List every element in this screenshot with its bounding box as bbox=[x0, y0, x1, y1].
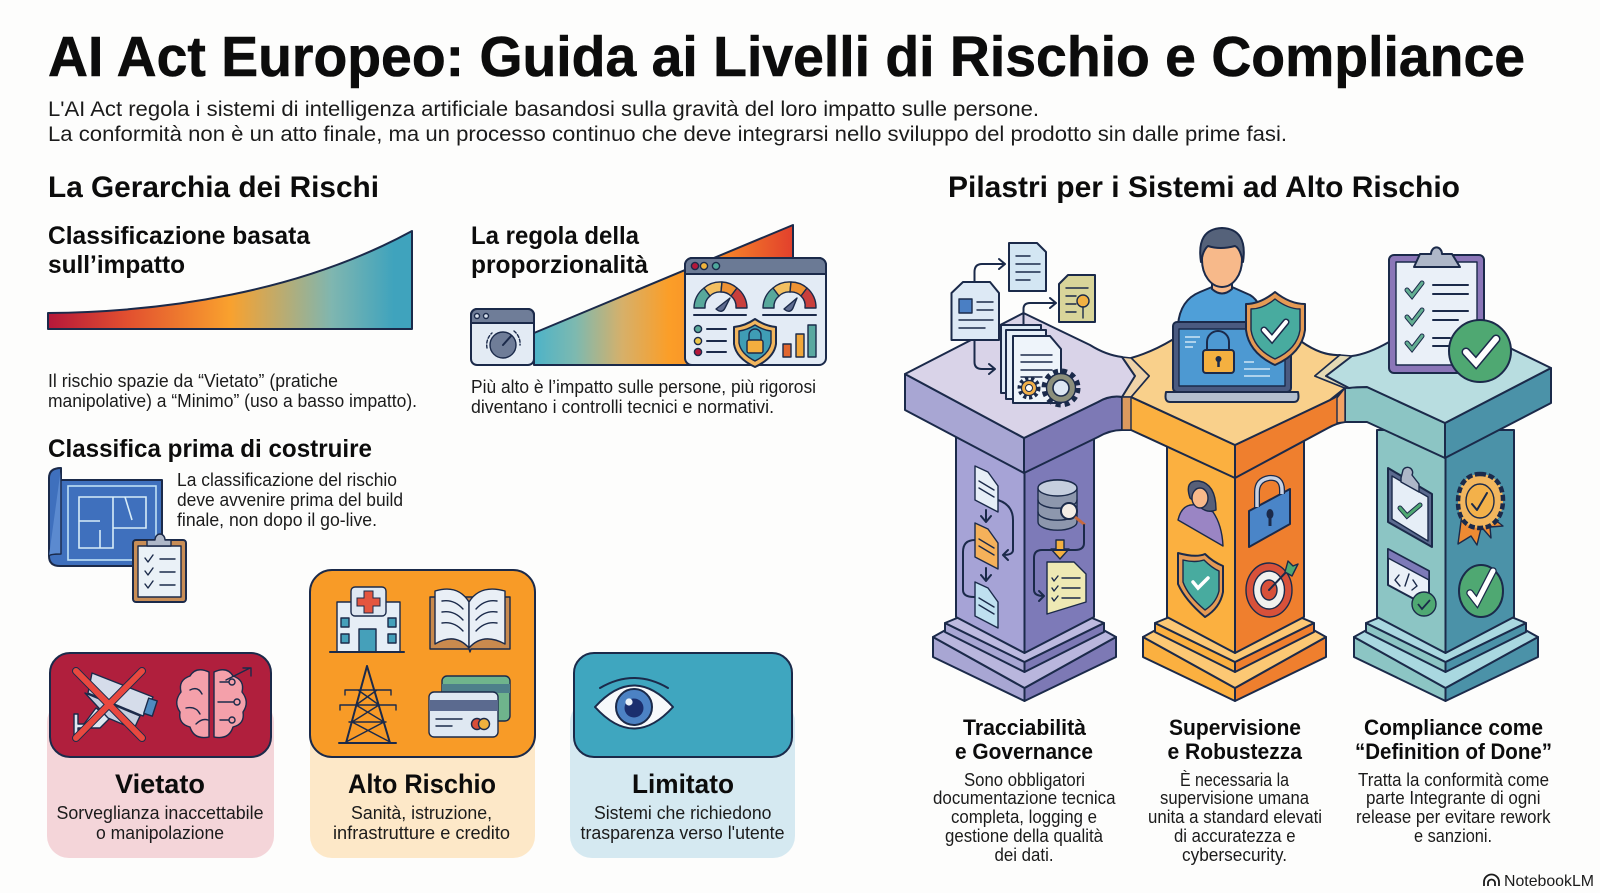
text: proportional rule bbox=[471, 377, 816, 417]
text: pillar 3 caption bbox=[1355, 715, 1552, 846]
heading: classificazione: sull’impatto bbox=[48, 251, 185, 279]
description: supervisione bbox=[1148, 770, 1322, 865]
heading: Compliance come Definition of Done bbox=[1355, 715, 1552, 764]
text: Limitato title: Limitato bbox=[632, 769, 734, 799]
text: Alto Rischio description: infrastrutture e credito bbox=[333, 823, 510, 843]
block: classifica prima di costruire bbox=[48, 435, 403, 602]
heading: Supervisione e Robustezza bbox=[1168, 715, 1303, 764]
platform: connected capitals bbox=[905, 307, 1551, 478]
description: supervisione: unita a standard elevati bbox=[1148, 807, 1322, 827]
icons: pillar 3 compliance bbox=[1388, 467, 1503, 617]
block: regola della proporzionalità bbox=[471, 222, 826, 417]
icon: shield bbox=[1246, 292, 1305, 365]
text: proportional rule: diventano i controlli tecnici e normativi. bbox=[471, 397, 774, 417]
chart: risk gradient curve bbox=[48, 231, 412, 329]
heading: Tracciabilità e Governance: Tracciabilità bbox=[963, 715, 1087, 740]
icon: person bbox=[1178, 228, 1264, 325]
heading: Compliance come Definition of Done: Compliance come bbox=[1364, 715, 1543, 740]
icon: dial window bbox=[471, 309, 534, 365]
icons: pillar 2 oversight bbox=[1178, 478, 1298, 617]
heading: proporzionalità: proporzionalità bbox=[471, 251, 648, 279]
icons: pillar 1 workflow bbox=[963, 466, 1086, 628]
text: risk range bbox=[48, 371, 417, 411]
description: supervisione: di accuratezza e bbox=[1174, 826, 1296, 846]
description: governance: Sono obbligatori bbox=[964, 770, 1085, 790]
card: Vietato bbox=[47, 653, 274, 858]
icon: eye bbox=[595, 678, 673, 728]
text: pillar 2 caption bbox=[1148, 715, 1322, 865]
icon: dashboard bbox=[685, 258, 826, 367]
heading: pilastri: Pilastri per i Sistemi ad Alto Rischio bbox=[948, 171, 1460, 204]
icon: checklist clipboard bbox=[1389, 247, 1484, 373]
description: governance: gestione della qualità bbox=[945, 826, 1104, 846]
card: Limitato bbox=[570, 653, 795, 858]
icon: hospital bbox=[330, 587, 404, 652]
text: classification timing: La classificazione del rischio bbox=[177, 470, 397, 490]
text: Vietato title: Vietato bbox=[115, 769, 205, 799]
heading: classificazione: Classificazione basata bbox=[48, 222, 311, 250]
pillar: Supervisione bbox=[1143, 430, 1326, 701]
description: governance bbox=[933, 770, 1116, 865]
icon: credit cards bbox=[429, 676, 510, 737]
icon: green check bbox=[1449, 320, 1511, 382]
description: supervisione: È necessaria la bbox=[1180, 770, 1290, 790]
title: AI Act Europeo: Guida ai Livelli di Rischio e Compliance bbox=[48, 25, 1525, 89]
text: Vietato description: Sorveglianza inaccettabile bbox=[56, 803, 264, 823]
chart: proportional wedge bbox=[534, 225, 793, 365]
card: Alto Rischio bbox=[310, 570, 535, 858]
description: compliance: release per evitare rework bbox=[1356, 807, 1551, 827]
text: classification timing: deve avvenire prima del build bbox=[177, 490, 403, 510]
text: Limitato description: trasparenza verso l'utente bbox=[580, 823, 784, 843]
heading: Tracciabilità e Governance bbox=[955, 715, 1093, 764]
text: Vietato description bbox=[56, 803, 264, 843]
text: pillar 1 caption bbox=[933, 715, 1116, 865]
description: governance: dei dati. bbox=[994, 845, 1054, 865]
text: classification timing: finale, non dopo il go-live. bbox=[177, 510, 377, 530]
heading: gerarchia dei rischi: La Gerarchia dei Rischi bbox=[48, 171, 379, 204]
description: compliance: parte Integrante di ogni bbox=[1366, 788, 1540, 808]
icon: crossed camera bbox=[74, 671, 157, 738]
heading: classificazione bbox=[48, 222, 311, 279]
intro text bbox=[48, 98, 1287, 146]
icon: gears bbox=[1020, 371, 1078, 405]
pillar: Compliance bbox=[1354, 430, 1538, 701]
text: Limitato description: Sistemi che richiedono bbox=[594, 803, 772, 823]
text: Alto Rischio description bbox=[333, 803, 510, 843]
text: risk range: Il rischio spazie da “Vietato” (pratiche bbox=[48, 371, 338, 391]
text: Limitato description bbox=[580, 803, 784, 843]
text: risk range: manipolative) a “Minimo” (uso a basso impatto). bbox=[48, 391, 417, 411]
intro text: L'AI Act regola i sistemi di intelligenza artificiale basandosi sulla gravità del loro impatto sulle persone. bbox=[48, 98, 1039, 121]
icon: clipboard bbox=[133, 534, 186, 602]
description: governance: documentazione tecnica bbox=[933, 788, 1116, 808]
icon: connected documents bbox=[952, 243, 1095, 403]
chart: three connected pillars bbox=[905, 228, 1551, 701]
text: Alto Rischio description: Sanità, istruzione, bbox=[351, 803, 492, 823]
description: compliance: e sanzioni. bbox=[1414, 826, 1492, 846]
text: Vietato description: o manipolazione bbox=[96, 823, 224, 843]
heading: Compliance come Definition of Done: “Definition of Done” bbox=[1355, 739, 1552, 764]
heading: classifica: Classifica prima di costruire bbox=[48, 435, 372, 463]
heading: Supervisione e Robustezza: e Robustezza bbox=[1168, 739, 1303, 764]
block: classificazione basata sull'impatto bbox=[48, 222, 417, 411]
intro text: La conformità non è un atto finale, ma un processo continuo che deve integrarsi nello sviluppo del prodotto sin dalle prime fasi. bbox=[48, 123, 1287, 146]
icon: brain bbox=[177, 668, 251, 738]
pillar: Tracciabilità bbox=[933, 430, 1116, 701]
description: compliance bbox=[1356, 770, 1551, 846]
text: proportional rule: Più alto è l’impatto sulle persone, più rigorosi bbox=[471, 377, 816, 397]
heading: Tracciabilità e Governance: e Governance bbox=[955, 739, 1093, 764]
icon: laptop with lock bbox=[1166, 322, 1298, 402]
heading: Supervisione e Robustezza: Supervisione bbox=[1169, 715, 1301, 740]
description: compliance: Tratta la conformità come bbox=[1358, 770, 1549, 790]
icon: power tower bbox=[339, 666, 396, 743]
description: supervisione: cybersecurity. bbox=[1182, 845, 1287, 865]
heading: proporzionalità: La regola della bbox=[471, 222, 640, 250]
description: supervisione: supervisione umana bbox=[1160, 788, 1310, 808]
heading: proporzionalità bbox=[471, 222, 648, 279]
brand: NotebookLM: NotebookLM bbox=[1504, 873, 1594, 890]
icon: open book bbox=[430, 589, 510, 652]
description: governance: completa, logging e bbox=[951, 807, 1097, 827]
icon: blueprint bbox=[49, 468, 162, 566]
text: classification timing bbox=[177, 470, 403, 530]
text: Alto Rischio title: Alto Rischio bbox=[348, 769, 496, 799]
